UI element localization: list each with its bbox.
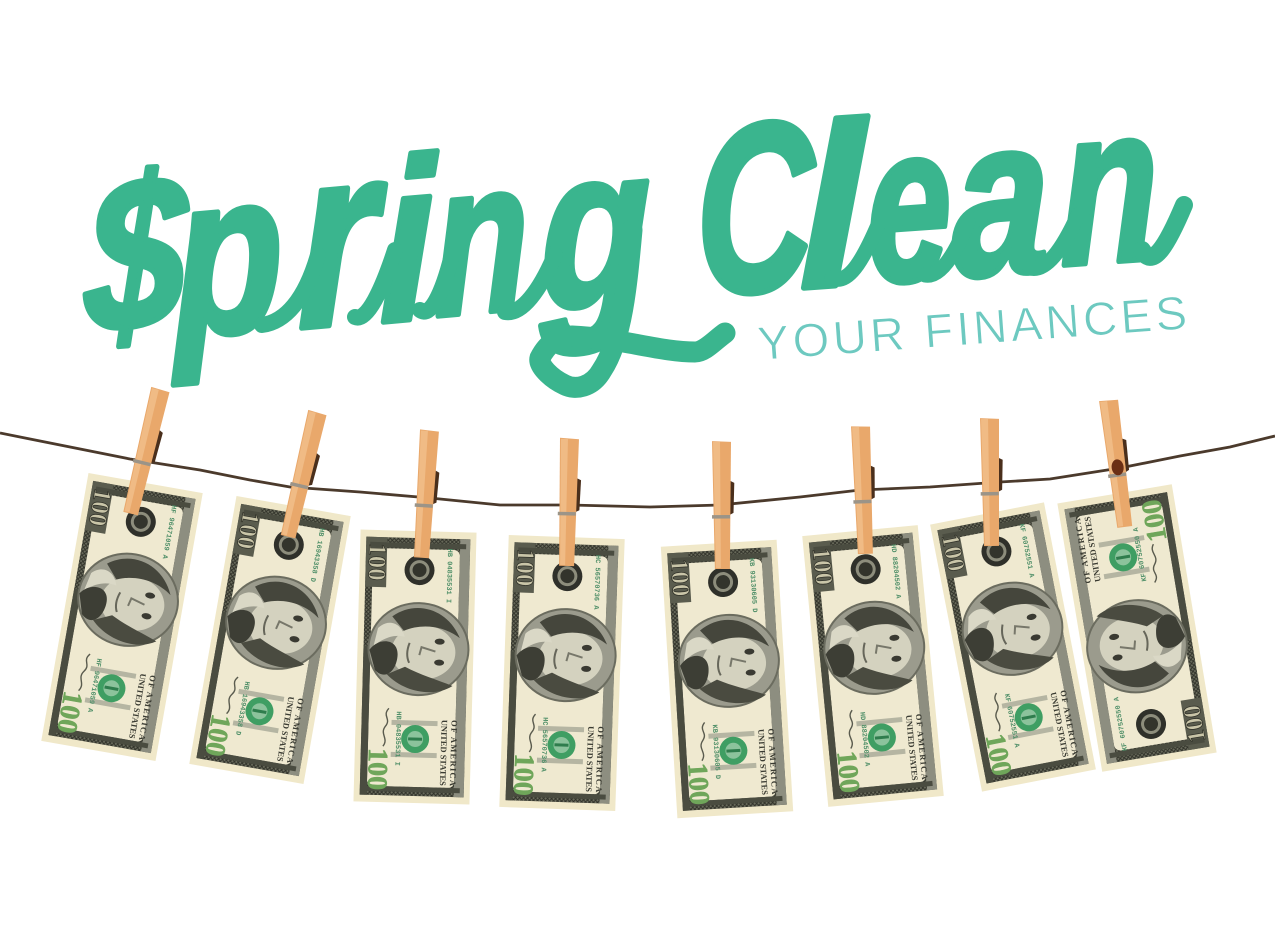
letter connectors of pring (262, 250, 555, 325)
bill 1 (41, 473, 203, 761)
bill 1: HF 96471059 A (160, 504, 177, 560)
bill 2: OF AMERICA (285, 697, 306, 765)
word: Clean: a (953, 71, 1049, 325)
word: pring: g (539, 97, 651, 359)
bill 7: 100 (936, 532, 969, 574)
bill 3: 100 (363, 543, 390, 581)
bill 4: 100 (510, 548, 539, 587)
word: Clean: C (695, 69, 817, 346)
bill 8 upside down: KF 60752550 A (1113, 695, 1130, 751)
clothespin 8 with wood knot (1099, 398, 1137, 528)
bill 1: 100 (50, 689, 88, 736)
swash of the g (540, 230, 725, 387)
bill 3: HB 04835531 I (444, 548, 453, 603)
bill 5: OF AMERICA (766, 728, 780, 795)
bill 8 upside down (1057, 484, 1217, 772)
bill 8 upside down: 100 (1136, 497, 1174, 544)
clothespin 3 (411, 429, 442, 559)
clothespin 1 (121, 387, 173, 516)
bill 8 upside down: OF AMERICA (1072, 517, 1093, 584)
bill 8 upside down: KF 60752550 A (1132, 526, 1149, 582)
bill 5: UNITED STATES (756, 729, 770, 795)
bill 1: OF AMERICA (137, 674, 158, 742)
clothespin 4 (557, 438, 582, 566)
bill 4: HC 56570736 A (539, 717, 548, 773)
bill 4: HC 56570736 A (591, 555, 601, 610)
bill 2: 100 (198, 712, 236, 759)
clothespin 5 (712, 441, 735, 569)
bill 6: 100 (807, 546, 837, 586)
bill 2: HB 16943358 D (233, 681, 250, 736)
bill 6 (802, 525, 944, 807)
word: Clean: e (866, 77, 952, 331)
word: pring: n (433, 112, 530, 362)
bill 5: 100 (681, 762, 715, 806)
bill 7: KF 60752551 A (1002, 693, 1020, 749)
bill 2: 100 (231, 510, 264, 551)
word: Clean: n (1060, 58, 1159, 313)
clothespin 7 (980, 418, 1004, 546)
clothespin 6 (851, 426, 878, 554)
letter connectors of Clean (832, 215, 1078, 279)
subtitle: YOUR FINANCES: YOUR FINANCES (756, 286, 1189, 370)
bill 3 (353, 530, 477, 804)
bill 4: OF AMERICA (594, 726, 606, 793)
swash of the n (1142, 205, 1184, 257)
bill 5 (661, 540, 793, 818)
bill 1: HF 96471059 A (85, 658, 102, 713)
bill 2: HB 16943358 D (308, 527, 325, 582)
bill 3: HB 04835531 I (392, 711, 402, 766)
bill 3: 100 (361, 748, 393, 790)
bill 1: UNITED STATES (127, 673, 148, 740)
dollar S letter: $ (84, 130, 188, 380)
word: pring (168, 90, 651, 386)
bill 5: 100 (665, 558, 694, 597)
bill 1: 100 (83, 487, 116, 528)
bill 6: HD 88204502 A (888, 544, 902, 600)
bill 6: UNITED STATES (904, 714, 920, 781)
word: pring: i (380, 110, 438, 371)
bill 3: UNITED STATES (438, 720, 450, 786)
bill 6: 100 (830, 750, 865, 794)
bill 7: UNITED STATES (1048, 691, 1071, 758)
bill 7 (930, 502, 1096, 792)
bill 8 upside down: 100 (1178, 703, 1211, 744)
clothespin 2 (278, 410, 330, 540)
bill 4 (499, 535, 625, 811)
word: pring: p (168, 122, 285, 386)
bill 7: KF 60752551 A (1017, 523, 1035, 579)
word: Clean (695, 58, 1159, 346)
bill 4: UNITED STATES (584, 726, 596, 792)
title: Spring Clean (84, 58, 1184, 387)
bill 7: OF AMERICA (1058, 689, 1081, 757)
bill 4: 100 (507, 753, 539, 796)
bill 2: UNITED STATES (275, 696, 296, 763)
bill 7: 100 (979, 731, 1017, 778)
bill 3: OF AMERICA (448, 720, 460, 787)
bill 5: KB 93130605 D (710, 724, 721, 779)
bill 5: KB 93130605 D (747, 558, 758, 613)
bill 6: HD 88204502 A (857, 712, 871, 768)
clothesline rope (0, 433, 1275, 507)
bill 6: OF AMERICA (914, 713, 930, 781)
word: pring: r (297, 90, 387, 383)
word: Clean: l (800, 75, 868, 337)
bill 8 upside down: UNITED STATES (1082, 516, 1103, 583)
bill 2 (189, 496, 351, 784)
